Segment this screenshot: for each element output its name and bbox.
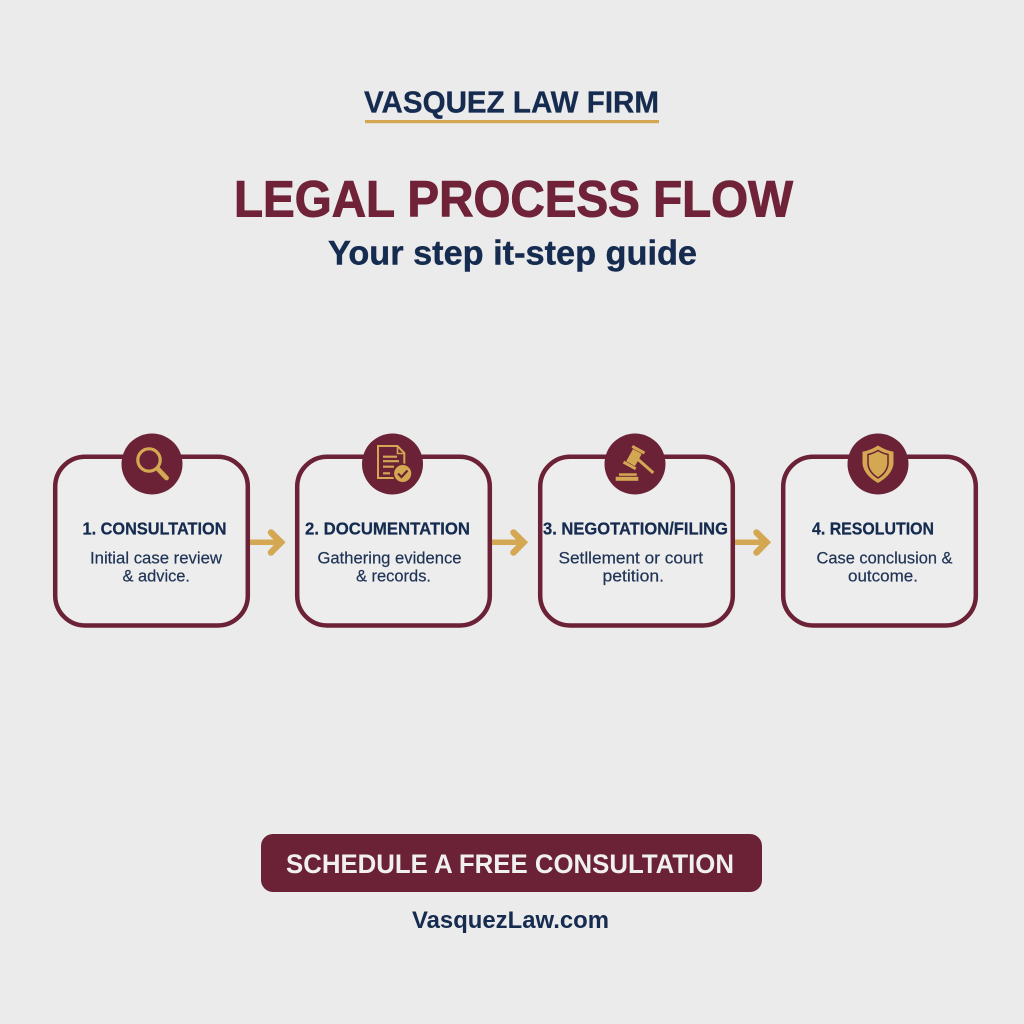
step description: & advice.: [122, 568, 190, 586]
panel: step 3 negotiation and filing: [540, 434, 733, 626]
arrow: step 3 to 4: [735, 532, 766, 552]
firm name: VASQUEZ LAW FIRM: [364, 86, 659, 120]
panel: step 4 resolution: [783, 434, 976, 626]
step description: Gathering evidence: [318, 550, 462, 568]
card outline: [540, 457, 733, 626]
call to action button: [261, 834, 762, 892]
arrow: step 1 to 2: [250, 532, 281, 552]
website: VasquezLaw.com: [412, 907, 609, 934]
step heading: 1. CONSULTATION: [82, 518, 226, 538]
gold underline: [365, 120, 659, 123]
call to action button: SCHEDULE A FREE CONSULTATION: [286, 849, 734, 879]
step description: Case conclusion &: [816, 550, 953, 568]
firm name header: [364, 86, 659, 123]
step description: outcome.: [848, 568, 918, 586]
card outline: [55, 457, 248, 626]
arrow: step 2 to 3: [492, 532, 524, 552]
subtitle: Your step it-step guide: [328, 234, 697, 272]
card outline: [297, 457, 490, 626]
icon: shield: [848, 434, 908, 494]
title: LEGAL PROCESS FLOW: [234, 170, 794, 227]
step heading: 3. NEGOTATION/FILING: [543, 518, 728, 538]
step description: petition.: [602, 568, 664, 586]
step description: Setllement or court: [558, 550, 704, 568]
icon: document with check: [362, 434, 423, 494]
step heading: 4. RESOLUTION: [812, 518, 934, 538]
step description: & records.: [356, 568, 431, 586]
panel: step 1 consultation: [55, 434, 248, 626]
panel: step 2 documentation: [297, 434, 490, 626]
icon: gavel: [604, 434, 666, 494]
step description: Initial case review: [90, 550, 222, 568]
card outline: [783, 457, 976, 626]
icon: magnifying glass: [122, 434, 182, 494]
step heading: 2. DOCUMENTATION: [305, 518, 470, 538]
